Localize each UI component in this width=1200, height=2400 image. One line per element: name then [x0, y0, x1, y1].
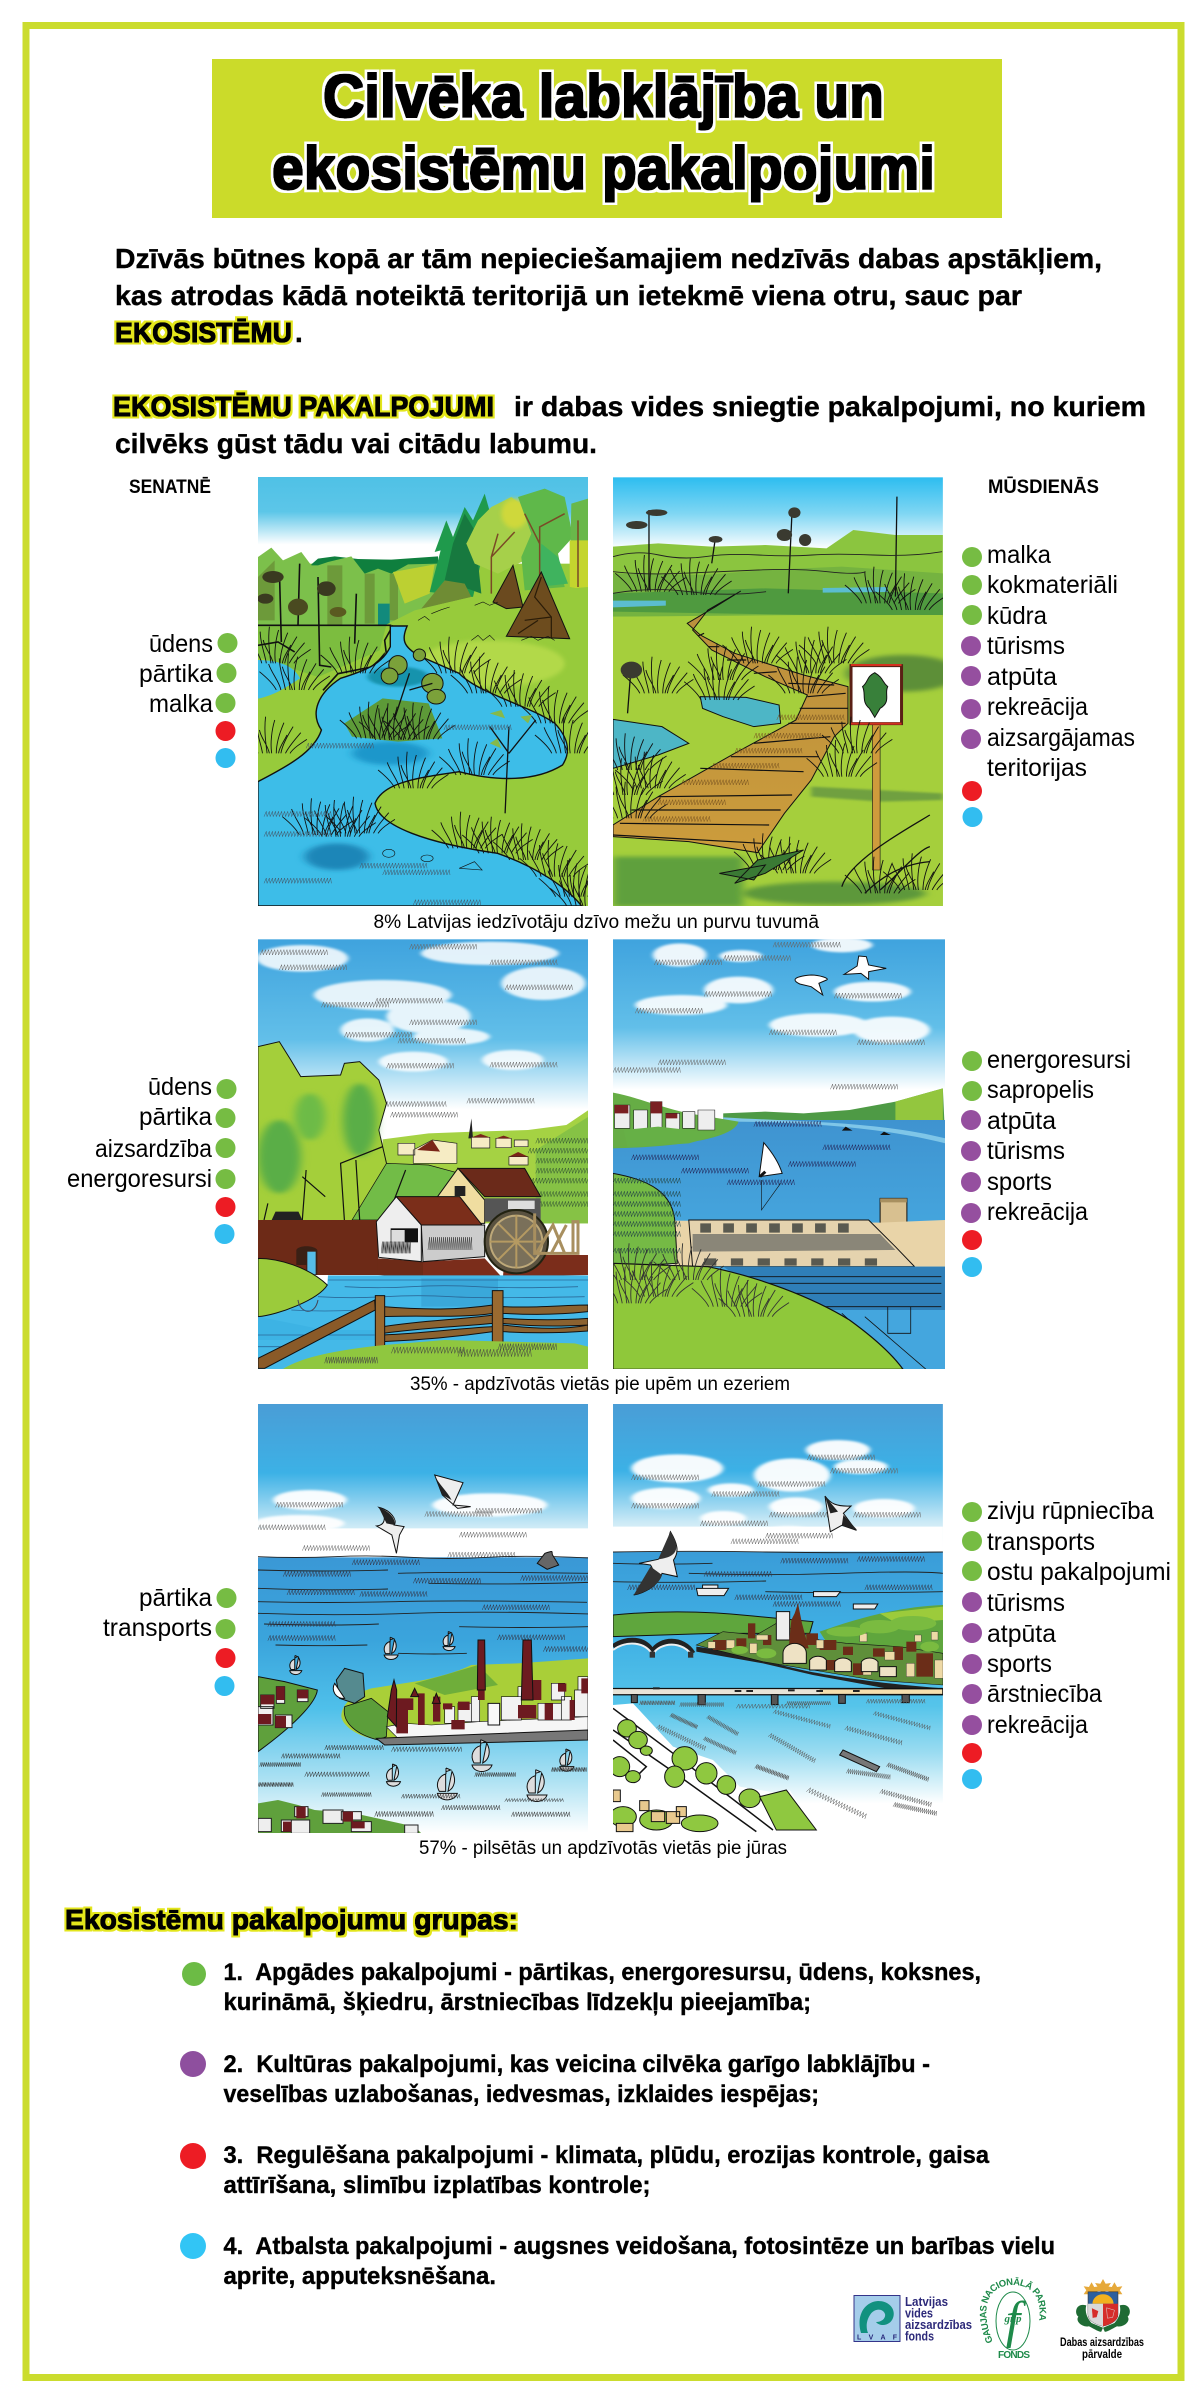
right list: present services, row 1: tūrisms — [987, 632, 1065, 660]
intro paragraph: ecosystem services definition — [113, 391, 1146, 459]
right list: present services, row 1: aizsargājamas — [987, 724, 1135, 752]
left list: past services, row 2: pārtika — [139, 1103, 212, 1131]
illustration: dam on a lake with sailboat — [596, 938, 945, 1369]
intro paragraph: ecosystem definition: kas atrodas kādā noteiktā teritorijā un ietekmē viena otru, sauc par — [115, 280, 1022, 311]
right list: present services, row 1: kokmateriāli — [987, 571, 1118, 599]
illustration: ancient wetland with tents — [258, 477, 588, 906]
group 1: provisioning services — [182, 1959, 981, 2016]
intro paragraph: ecosystem services definition: EKOSISTĒMU PAKALPOJUMI — [113, 391, 494, 422]
left list: past services, row 2: energoresursi — [67, 1165, 212, 1193]
group 3: regulating services — [180, 2142, 989, 2199]
right list: present services, row 2: rekreācija — [987, 1198, 1088, 1226]
right list: present services, row 2 — [961, 1046, 1131, 1277]
right list: present services, row 1: kūdra — [987, 602, 1047, 630]
illustration: medieval harbour town by the sea — [253, 1404, 611, 1833]
logo: Latvian Environmental Protection Fund: Latvijas — [905, 2294, 948, 2309]
logo: Latvian Environmental Protection Fund: vides — [905, 2306, 933, 2320]
logo: Gauja National Park Fund: FONDS — [998, 2350, 1030, 2361]
right list: present services, row 1: atpūta — [987, 663, 1057, 691]
title banner: Cilvēka labklājība un — [323, 63, 884, 130]
left list: past services, row 1: malka — [149, 690, 213, 718]
left list: past services, row 1: ūdens — [149, 630, 213, 658]
right list: present services, row 3: sports — [987, 1650, 1052, 1678]
logo: Gauja National Park Fund: gnp — [1003, 2313, 1022, 2325]
illustration: modern bog boardwalk with nature sign — [613, 477, 943, 906]
right list: present services, row 3 — [962, 1497, 1171, 1789]
right list: present services, row 2: atpūta — [987, 1107, 1056, 1135]
column heading: present: MŪSDIENĀS — [988, 477, 1099, 498]
intro paragraph: ecosystem definition: Dzīvās būtnes kopā ar tām nepieciešamajiem nedzīvās dabas apstākļiem, — [115, 243, 1102, 274]
group 2: cultural services: veselības uzlabošanas, iedvesmas, izklaides iespējas; — [224, 2081, 819, 2108]
group 4: supporting services: aprite, apputeksnēšana. — [224, 2263, 496, 2290]
right list: present services, row 2: sports — [987, 1168, 1052, 1196]
logo: Nature Conservation Agency: Dabas aizsardzības — [1060, 2335, 1144, 2349]
logo: Latvian Environmental Protection Fund — [854, 2294, 972, 2344]
illustration: modern port city with bridges — [610, 1404, 943, 1832]
right list: present services, row 3: transports — [987, 1528, 1095, 1556]
intro paragraph: ecosystem services definition: cilvēks gūst tādu vai citādu labumu. — [115, 428, 597, 459]
caption: rivers and lakes: 35% - apdzīvotās vietās pie upēm un ezeriem — [410, 1374, 790, 1395]
title banner — [212, 59, 1002, 218]
group 3: regulating services: attīrīšana, slimību izplatības kontrole; — [224, 2172, 650, 2199]
group 1: provisioning services: 1. Apgādes pakalpojumi - pārtikas, energoresursu, ūdens, koksnes, — [224, 1959, 981, 1986]
right list: present services, row 1: teritorijas — [987, 754, 1087, 782]
right list: present services, row 3: tūrisms — [987, 1589, 1065, 1617]
right list: present services, row 3: atpūta — [987, 1620, 1056, 1648]
group 1: provisioning services: kurināmā, šķiedru, ārstniecības līdzekļu pieejamība; — [224, 1989, 811, 2016]
intro paragraph: ecosystem services definition: ir dabas vides sniegtie pakalpojumi, no kuriem — [514, 391, 1146, 422]
intro paragraph: ecosystem definition: EKOSISTĒMU — [115, 317, 292, 348]
group 2: cultural services: 2. Kultūras pakalpojumi, kas veicina cilvēka garīgo labklājību - — [224, 2051, 930, 2078]
left list: past services, row 1: pārtika — [139, 660, 213, 688]
group 4: supporting services — [180, 2233, 1055, 2290]
right list: present services, row 2: tūrisms — [987, 1137, 1065, 1165]
caption: coastal settlements: 57% - pilsētās un apdzīvotās vietās pie jūras — [419, 1838, 787, 1859]
right list: present services, row 3: ārstniecība — [987, 1680, 1102, 1708]
left list: past services, row 1 — [139, 630, 238, 768]
left list: past services, row 3 — [103, 1584, 236, 1696]
left list: past services, row 2: aizsardzība — [95, 1135, 212, 1163]
caption: forests and bogs: 8% Latvijas iedzīvotāju dzīvo mežu un purvu tuvumā — [374, 912, 819, 933]
group 3: regulating services: 3. Regulēšana pakalpojumi - klimata, plūdu, erozijas kontrole, gaisa — [224, 2142, 989, 2169]
right list: present services, row 1: malka — [987, 541, 1051, 569]
left list: past services, row 2: ūdens — [148, 1073, 212, 1101]
group 4: supporting services: 4. Atbalsta pakalpojumi - augsnes veidošana, fotosintēze un barības vielu — [224, 2233, 1055, 2260]
right list: present services, row 2: sapropelis — [987, 1076, 1094, 1104]
right list: present services, row 3: ostu pakalpojumi — [987, 1558, 1171, 1586]
column heading: past: SENATNĒ — [129, 477, 211, 498]
left list: past services, row 2 — [67, 1073, 236, 1244]
logo: Latvian Environmental Protection Fund: fonds — [905, 2328, 934, 2344]
right list: present services, row 2: energoresursi — [987, 1046, 1131, 1074]
right list: present services, row 3: zivju rūpniecība — [987, 1497, 1154, 1525]
logo: Gauja National Park Fund: f — [1006, 2292, 1027, 2349]
logo: Nature Conservation Agency — [1060, 2279, 1144, 2361]
left list: past services, row 3: transports — [103, 1614, 212, 1642]
logo: Nature Conservation Agency: pārvalde — [1082, 2347, 1122, 2361]
title banner: ekosistēmu pakalpojumi — [272, 135, 935, 202]
intro paragraph: ecosystem definition — [115, 243, 1102, 348]
intro paragraph: ecosystem definition: . — [295, 317, 303, 348]
right list: present services, row 1 — [961, 541, 1135, 827]
section heading: service groups: Ekosistēmu pakalpojumu grupas: — [65, 1904, 518, 1935]
illustration: watermill by a river — [256, 939, 603, 1370]
right list: present services, row 1: rekreācija — [987, 693, 1088, 721]
logo: Latvian Environmental Protection Fund: aizsardzības — [905, 2317, 972, 2332]
left list: past services, row 3: pārtika — [139, 1584, 212, 1612]
logo: Gauja National Park Fund: GAUJAS NACIONĀLĀ PARKA — [980, 2277, 1046, 2343]
logo: Latvian Environmental Protection Fund: L V A F — [857, 2334, 898, 2342]
group 2: cultural services — [180, 2051, 930, 2108]
right list: present services, row 3: rekreācija — [987, 1711, 1088, 1739]
